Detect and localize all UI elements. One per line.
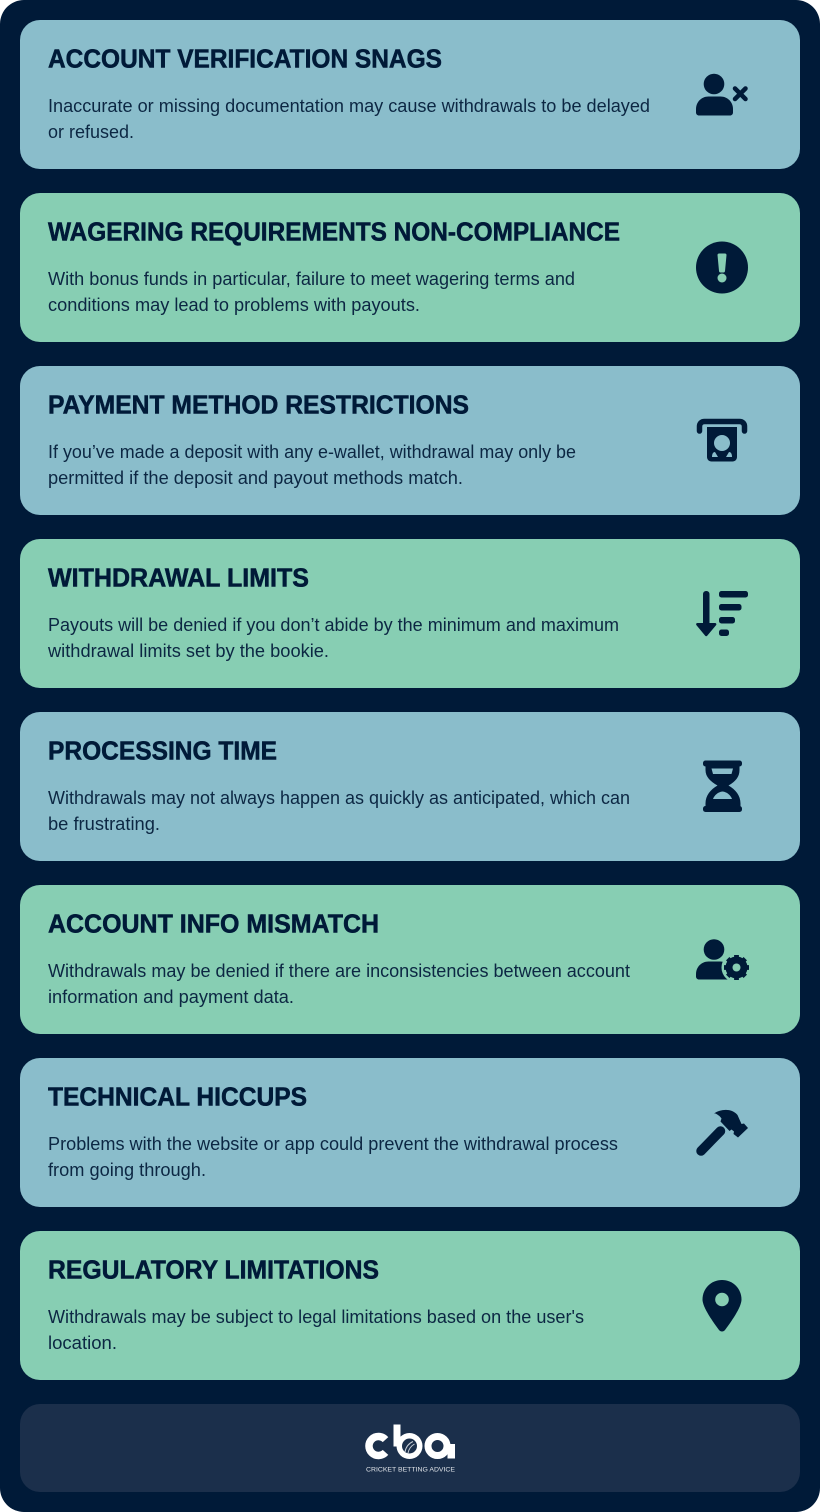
panel: account verification snags [20,20,800,169]
heading: withdrawal limits: WITHDRAWAL LIMITS [48,562,309,592]
icon: hourglass [703,760,742,812]
heading: account verification snags: ACCOUNT VERIFICATION SNAGS [48,44,442,74]
panel: processing time [20,712,800,861]
icon: map pin [702,1280,742,1332]
text: processing time [48,788,630,834]
text: wagering requirements [48,269,575,315]
icon: descending sort arrow [696,591,748,636]
text: payment method restrictions: If you’ve made a deposit with any e-wallet, withdrawal may only be [48,442,576,462]
text: withdrawal limits: Payouts will be denied if you don’t abide by the minimum and maximum [48,615,619,635]
text: regulatory limitations: location. [48,1333,117,1353]
text: account verification snags: or refused. [48,122,134,142]
text: payment method restrictions [48,442,576,488]
icon: hammer [701,1110,748,1151]
text: regulatory limitations: Withdrawals may be subject to legal limitations based on the user's [48,1307,584,1327]
panel: wagering requirements non-compliance [20,193,800,342]
text: payment method restrictions: permitted if the deposit and payout methods match. [48,468,463,488]
text: account info mismatch: Withdrawals may be denied if there are inconsistencies between account [48,961,630,981]
text: technical hiccups: Problems with the website or app could prevent the withdrawal process [48,1134,618,1154]
text: processing time: Withdrawals may not always happen as quickly as anticipated, which can [48,788,630,808]
icon: exclamation circle [696,242,748,294]
text: account info mismatch [48,961,630,1007]
text: account info mismatch: information and payment data. [48,987,294,1007]
icon: user with gear [696,939,752,982]
text: withdrawal limits [47,615,619,661]
text: regulatory limitations [48,1307,584,1353]
panel: regulatory limitations [20,1231,800,1380]
text: processing time: be frustrating. [48,814,160,834]
logo tagline: CRICKET BETTING ADVICE [366,1468,455,1474]
text: wagering requirements: conditions may lead to problems with payouts. [48,295,420,315]
logo: cba [366,1424,455,1474]
heading: processing time: PROCESSING TIME [48,736,277,766]
panel: technical hiccups [20,1058,800,1207]
panel: withdrawal limits [20,539,800,688]
icon: user with cross [696,74,746,116]
text: withdrawal limits: withdrawal limits set by the bookie. [47,641,329,661]
text: account verification snags: Inaccurate or missing documentation may cause withdrawals to be delayed [48,96,650,116]
heading: payment method restrictions: PAYMENT METHOD RESTRICTIONS [48,390,469,420]
panel: account info mismatch [20,885,800,1034]
text: wagering requirements: With bonus funds in particular, failure to meet wagering terms and [48,269,575,289]
icon: cash dispenser [700,422,744,462]
logo letter b [394,1424,422,1459]
heading: account info mismatch: ACCOUNT INFO MISMATCH [48,908,379,938]
logo letter a [428,1436,455,1458]
heading: wagering requirements non-compliance: WAGERING REQUIREMENTS NON-COMPLIANCE [48,216,620,246]
text: technical hiccups [48,1134,618,1180]
text: account verification snags [48,96,650,142]
heading: regulatory limitations: REGULATORY LIMITATIONS [48,1254,379,1284]
panel: payment method restrictions [20,366,800,515]
logo letter c [369,1436,386,1455]
text: technical hiccups: from going through. [48,1160,206,1180]
panel: footer [20,1404,800,1492]
heading: technical hiccups: TECHNICAL HICCUPS [48,1082,307,1112]
